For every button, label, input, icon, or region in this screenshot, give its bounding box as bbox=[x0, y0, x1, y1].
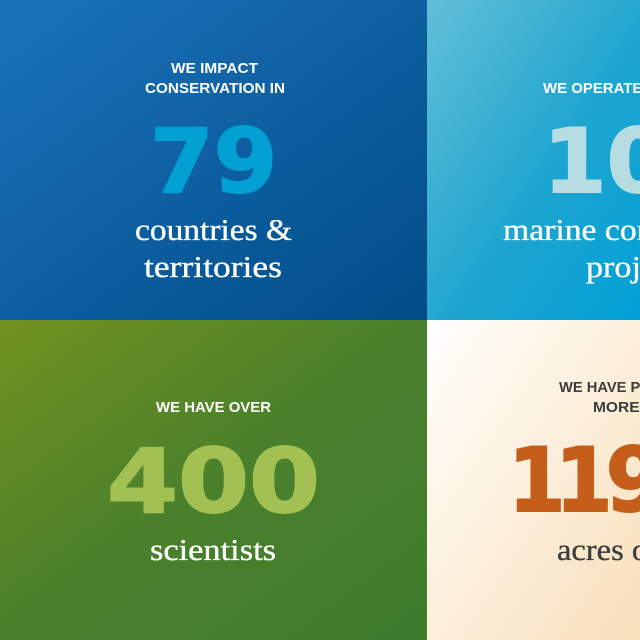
label: scientists: scientists bbox=[150, 532, 276, 567]
panel: scientists bbox=[0, 320, 427, 640]
label: marine conservation projects bbox=[503, 212, 640, 284]
number: 400: 400 bbox=[107, 432, 320, 533]
panel: marine conservation projects bbox=[427, 0, 640, 320]
heading: we impact conservation in bbox=[145, 60, 285, 97]
label: countries and territories bbox=[135, 212, 292, 284]
label: countries and territories: territories bbox=[144, 249, 282, 284]
heading: we have over: WE HAVE OVER bbox=[156, 399, 271, 416]
number: 79: 79 bbox=[150, 112, 277, 214]
heading: we impact conservation in: CONSERVATION IN bbox=[145, 80, 285, 97]
heading: we have protected more than bbox=[559, 379, 640, 416]
label: countries and territories: countries & bbox=[135, 212, 292, 247]
heading: we impact conservation in: WE IMPACT bbox=[171, 60, 258, 77]
panel: acres protected bbox=[427, 320, 640, 640]
panel: countries and territories bbox=[0, 0, 427, 320]
